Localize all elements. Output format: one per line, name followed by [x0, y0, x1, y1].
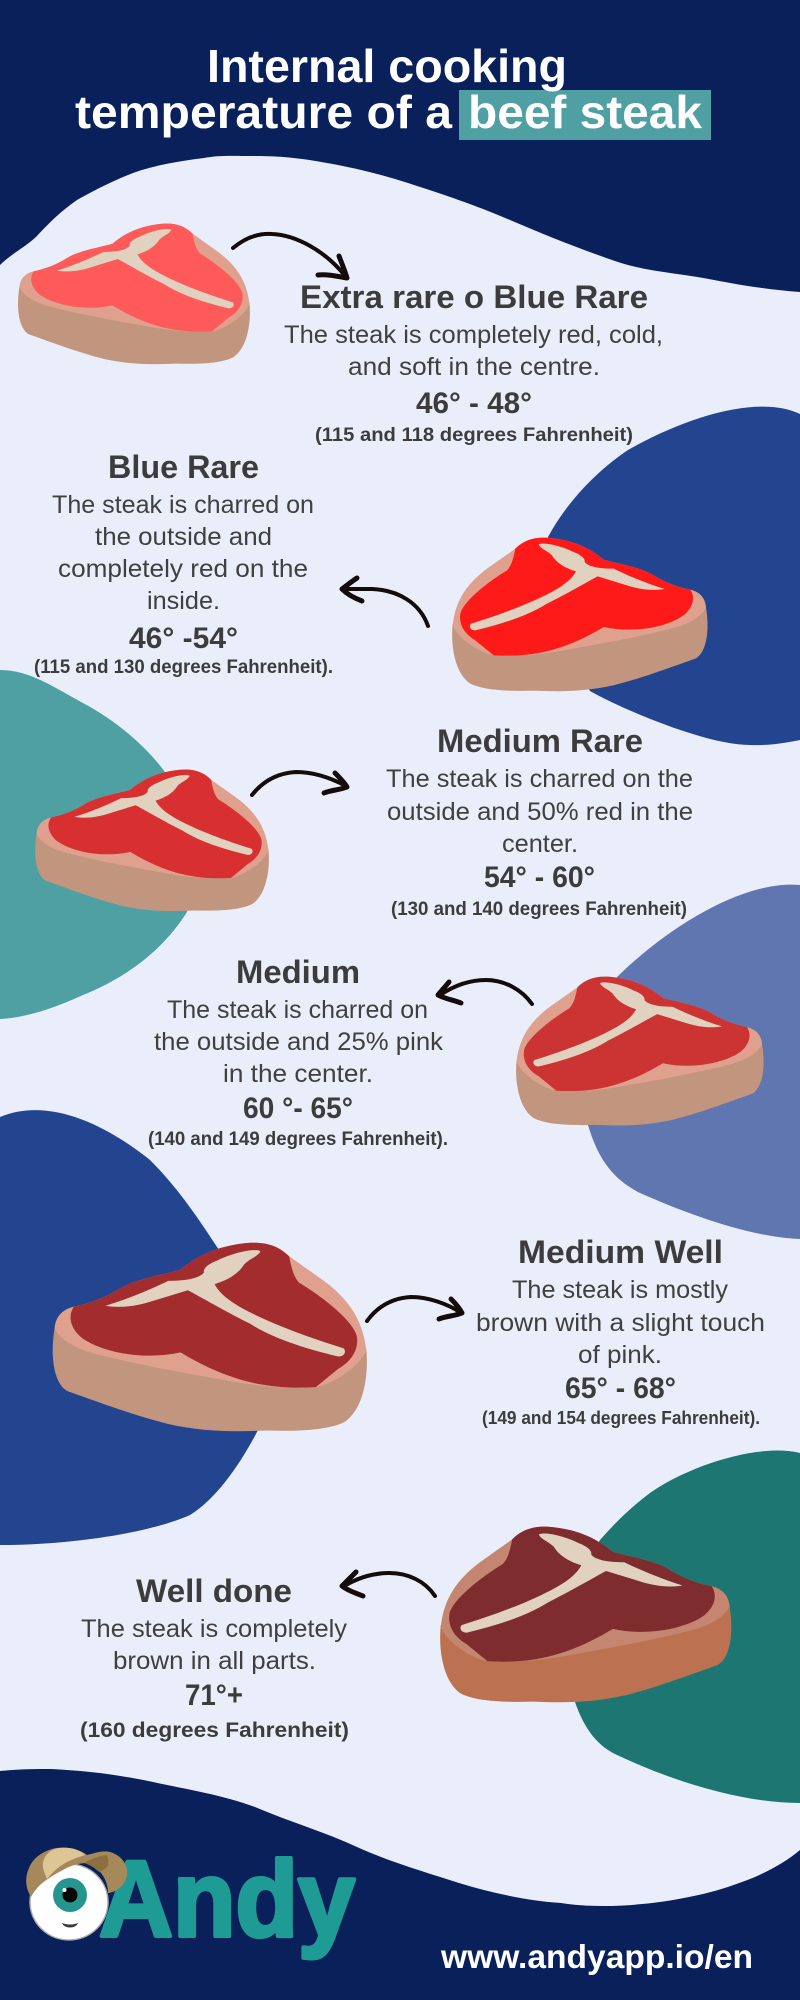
- fahrenheit: (149 and 154 degrees Fahrenheit).: [482, 1408, 760, 1428]
- steak: blue rare: [452, 538, 708, 691]
- description: [52, 491, 314, 615]
- footer wave background: [0, 1769, 800, 2000]
- description: [386, 765, 693, 858]
- logo wordmark: Andy: [99, 1838, 355, 1959]
- blob: periwinkle right: [570, 885, 800, 1239]
- description: [284, 321, 663, 381]
- title highlighted words: beef steak: [468, 86, 702, 138]
- section: medium rare text: [386, 723, 693, 920]
- description: in the center.: [223, 1060, 373, 1088]
- temperature: 60 °- 65°: [243, 1092, 353, 1125]
- arrow: medium: [438, 980, 532, 1004]
- section: medium well text: [476, 1234, 765, 1428]
- description: The steak is charred on: [167, 996, 428, 1024]
- fahrenheit: (115 and 118 degrees Fahrenheit): [315, 425, 633, 446]
- blob: blue right: [548, 407, 800, 745]
- steak: medium rare: [35, 770, 269, 911]
- heading: Well done: [136, 1573, 292, 1609]
- icon: mascot eye with hat: [26, 1848, 127, 1940]
- section: blue rare text: [34, 449, 333, 678]
- temperature: 46° - 48°: [416, 387, 532, 420]
- steak: medium: [516, 977, 764, 1125]
- heading: Medium Well: [518, 1234, 723, 1270]
- section: well done text: [80, 1573, 349, 1742]
- description: center.: [502, 830, 578, 858]
- header wave background: [0, 0, 800, 292]
- temperature: 54° - 60°: [484, 861, 595, 894]
- temperature: 71°+: [185, 1679, 243, 1712]
- description: brown with a slight touch: [476, 1309, 765, 1337]
- description: The steak is charred on the: [386, 765, 693, 793]
- arrow: medium rare: [252, 772, 347, 795]
- description: The steak is completely red, cold,: [284, 321, 663, 349]
- arrow: medium well: [367, 1297, 462, 1321]
- logo: Andy: [26, 1838, 355, 1959]
- description: the outside and: [95, 523, 272, 551]
- blob: dark teal right: [555, 1451, 800, 1803]
- title line two: temperature of a: [75, 86, 452, 138]
- fahrenheit: (130 and 140 degrees Fahrenheit): [391, 899, 687, 920]
- heading: Medium: [236, 954, 360, 990]
- arrow: well done: [342, 1572, 435, 1596]
- title highlight box: [459, 90, 711, 140]
- section: extra rare text: [284, 279, 663, 446]
- description: outside and 50% red in the: [387, 798, 693, 826]
- website url: www.andyapp.io/en: [440, 1938, 753, 1975]
- description: inside.: [147, 587, 220, 615]
- description: [81, 1615, 348, 1675]
- blob: blue left: [0, 1110, 290, 1545]
- description: brown in all parts.: [113, 1647, 316, 1675]
- blob: teal left: [0, 670, 200, 1019]
- section: medium text: [148, 954, 448, 1150]
- heading: Blue Rare: [108, 449, 259, 485]
- heading: Medium Rare: [437, 723, 643, 759]
- description: The steak is mostly: [512, 1276, 729, 1304]
- arrow: extra rare: [233, 234, 347, 278]
- description: the outside and 25% pink: [154, 1028, 444, 1056]
- temperature: 65° - 68°: [565, 1372, 676, 1405]
- fahrenheit: (115 and 130 degrees Fahrenheit).: [34, 657, 333, 678]
- description: [476, 1276, 765, 1369]
- fahrenheit: (160 degrees Fahrenheit): [80, 1719, 349, 1742]
- description: and soft in the centre.: [348, 353, 600, 381]
- heading: Extra rare o Blue Rare: [300, 279, 648, 315]
- description: completely red on the: [58, 555, 308, 583]
- description: of pink.: [578, 1341, 662, 1369]
- title: [75, 40, 711, 140]
- steak: extra rare: [18, 224, 250, 364]
- fahrenheit: (140 and 149 degrees Fahrenheit).: [148, 1129, 448, 1150]
- title line one: Internal cooking: [207, 40, 567, 92]
- description: The steak is charred on: [52, 491, 314, 519]
- description: [154, 996, 444, 1088]
- arrow: blue rare: [342, 578, 428, 626]
- description: The steak is completely: [81, 1615, 348, 1643]
- temperature: 46° -54°: [129, 622, 238, 655]
- steak: medium well: [53, 1243, 367, 1431]
- steak: well done: [440, 1527, 731, 1702]
